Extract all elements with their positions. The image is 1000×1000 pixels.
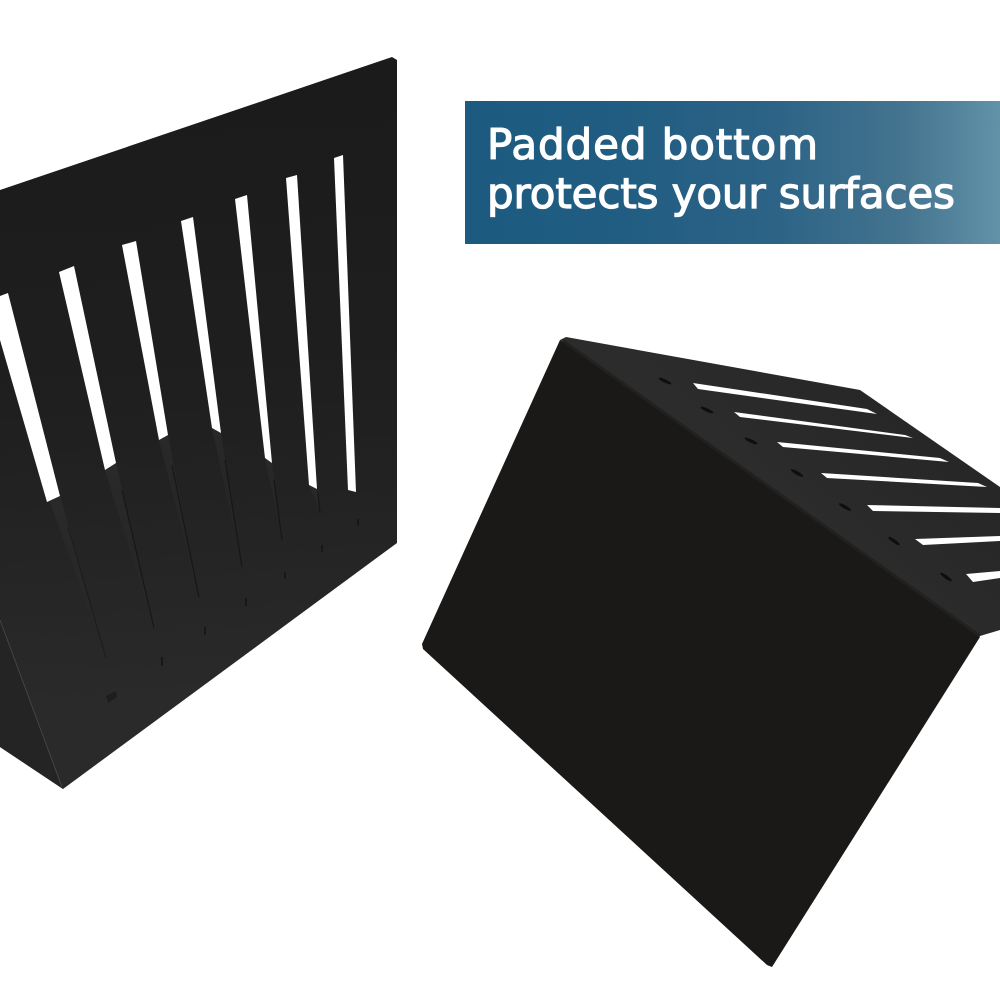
- left block side face: [0, 620, 63, 789]
- right block notches: [658, 377, 953, 582]
- right knife block: [422, 337, 1000, 967]
- left block slots: [0, 155, 356, 502]
- top slotted face: [560, 337, 1000, 636]
- slot shadow lines: [68, 460, 320, 658]
- padded bottom face: [422, 340, 980, 967]
- left block corner crease: [0, 620, 62, 787]
- banner: [465, 101, 1000, 244]
- crease shading: [563, 341, 980, 636]
- banner text: Padded bottom: [487, 120, 818, 169]
- banner text: protects your surfaces: [487, 169, 955, 218]
- slot reflections: [50, 428, 320, 658]
- left knife block: [0, 57, 397, 789]
- right block slots: [693, 383, 1000, 582]
- small notches: [106, 519, 359, 703]
- banner text: [487, 120, 955, 218]
- left block front face: [0, 57, 397, 789]
